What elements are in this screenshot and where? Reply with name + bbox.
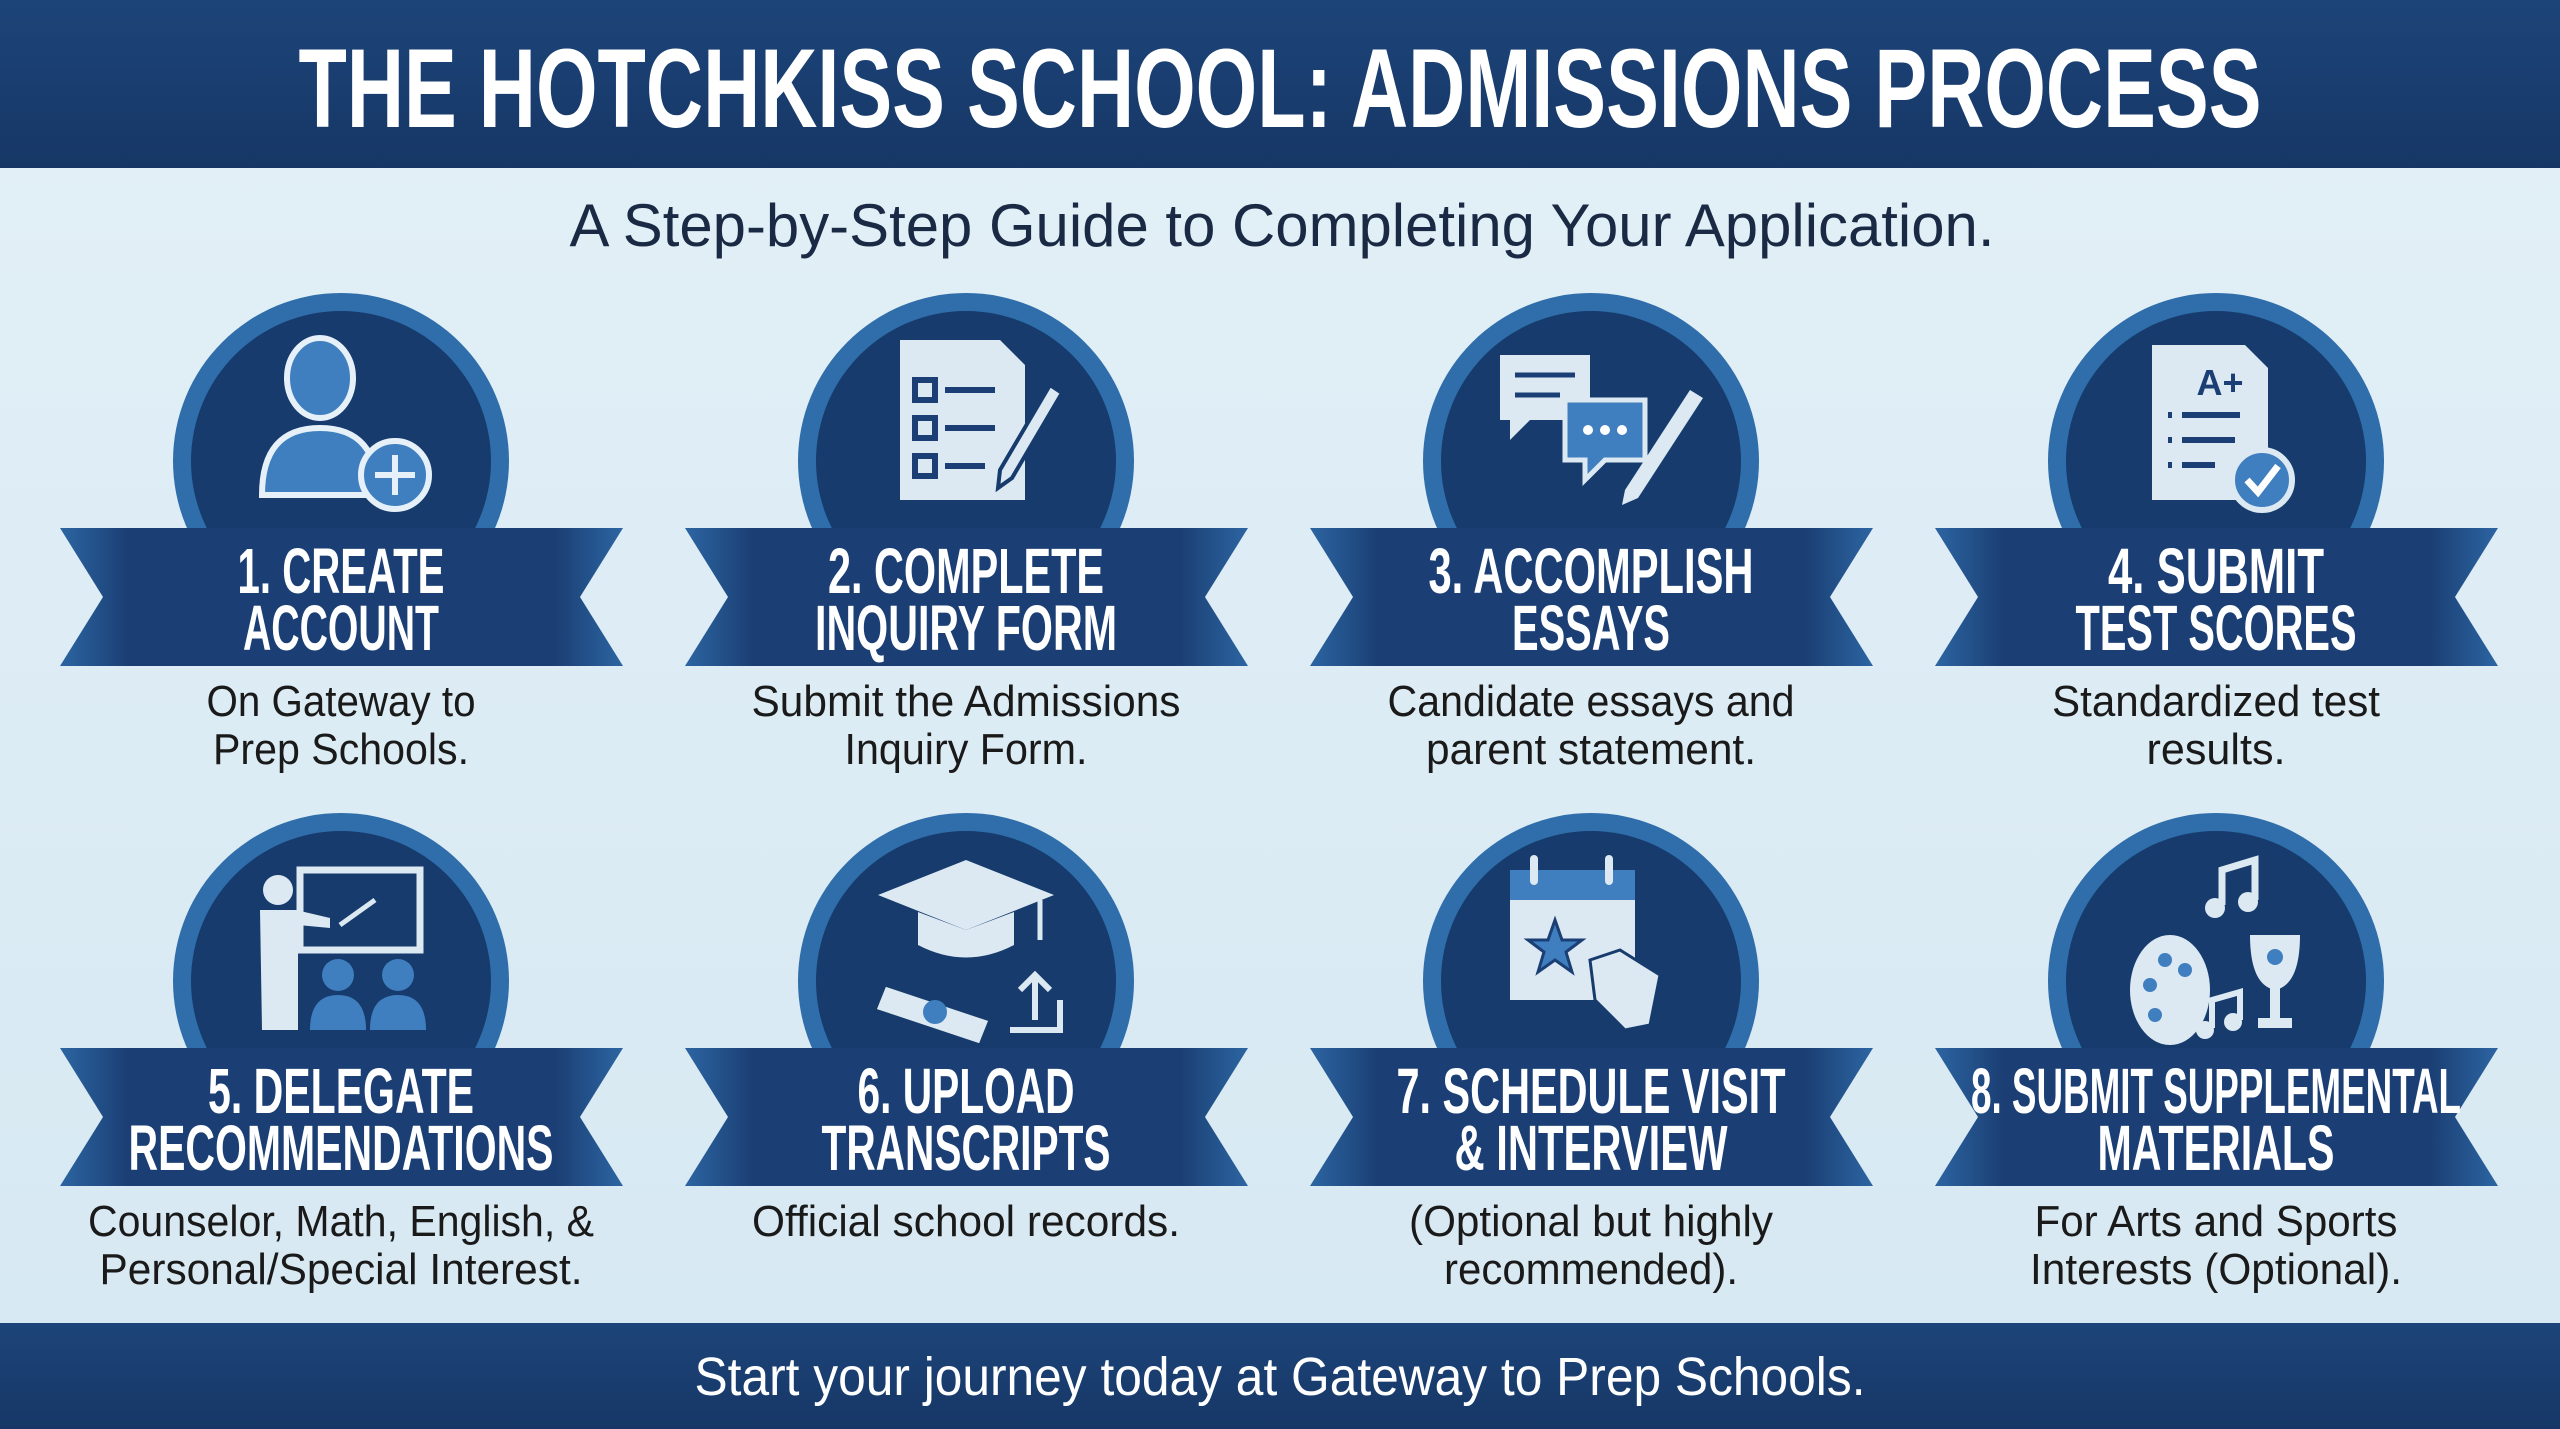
step 8: For Arts and Sports (2034, 1197, 2398, 1246)
step 1: On Gateway to (206, 677, 476, 726)
icon: A+ test document (2152, 345, 2292, 510)
icon: calendar star handshake (1510, 855, 1660, 1030)
icon: graduation cap, diploma, upload (875, 860, 1060, 1045)
step 5: Personal/Special Interest. (100, 1245, 582, 1294)
step 2: INQUIRY FORM (815, 592, 1117, 664)
icon: person plus (262, 338, 429, 509)
step 3: parent statement. (1426, 725, 1756, 774)
icon: palette, music notes, trophy (2130, 860, 2300, 1045)
step 4: 4. SUBMIT (2108, 535, 2324, 607)
step 7: & INTERVIEW (1454, 1112, 1728, 1184)
step 3: Candidate essays and (1388, 677, 1794, 726)
step 5: RECOMMENDATIONS (128, 1112, 554, 1184)
step 6: Official school records. (752, 1197, 1180, 1246)
step 3: ESSAYS (1512, 592, 1670, 664)
step 6: 6. UPLOAD (858, 1055, 1074, 1127)
step 2: Submit the Admissions (752, 677, 1180, 726)
step 6: TRANSCRIPTS (822, 1112, 1110, 1184)
step 4 (1935, 293, 2498, 774)
subtitle: A Step-by-Step Guide to Completing Your Application. (570, 192, 1994, 259)
icon: A+ test document: A+ (2196, 362, 2244, 403)
step 7: 7. SCHEDULE VISIT (1396, 1055, 1786, 1127)
icon: teacher at board (260, 870, 426, 1030)
step 4: TEST SCORES (2076, 592, 2356, 664)
step 4: Standardized test (2052, 677, 2380, 726)
step 7: recommended). (1444, 1245, 1738, 1294)
step 1: Prep Schools. (213, 725, 469, 774)
title bar (0, 0, 2560, 168)
footer bar: Start your journey today at Gateway to Prep Schools. (694, 1347, 1866, 1407)
footer bar (0, 1323, 2560, 1429)
icon: speech bubbles and pen (1500, 355, 1703, 505)
step 6 (685, 813, 1248, 1246)
icon: form with pen (900, 340, 1062, 500)
step 8: Interests (Optional). (2030, 1245, 2402, 1294)
step 2 (685, 293, 1248, 774)
step 5: Counselor, Math, English, & (88, 1197, 594, 1246)
step 2: Inquiry Form. (844, 725, 1088, 774)
step 7: (Optional but highly (1409, 1197, 1773, 1246)
step 2: 2. COMPLETE (828, 535, 1104, 607)
step 1: ACCOUNT (243, 592, 439, 664)
step 1 (60, 293, 623, 774)
step 3: 3. ACCOMPLISH (1428, 535, 1754, 607)
step 7 (1310, 813, 1873, 1294)
step 8 (1935, 813, 2498, 1294)
step 5 (60, 813, 623, 1294)
step 1: 1. CREATE (238, 535, 444, 607)
step 8: MATERIALS (2098, 1112, 2334, 1184)
step 5: 5. DELEGATE (208, 1055, 474, 1127)
step 3 (1310, 293, 1873, 774)
step 4: results. (2146, 725, 2286, 774)
